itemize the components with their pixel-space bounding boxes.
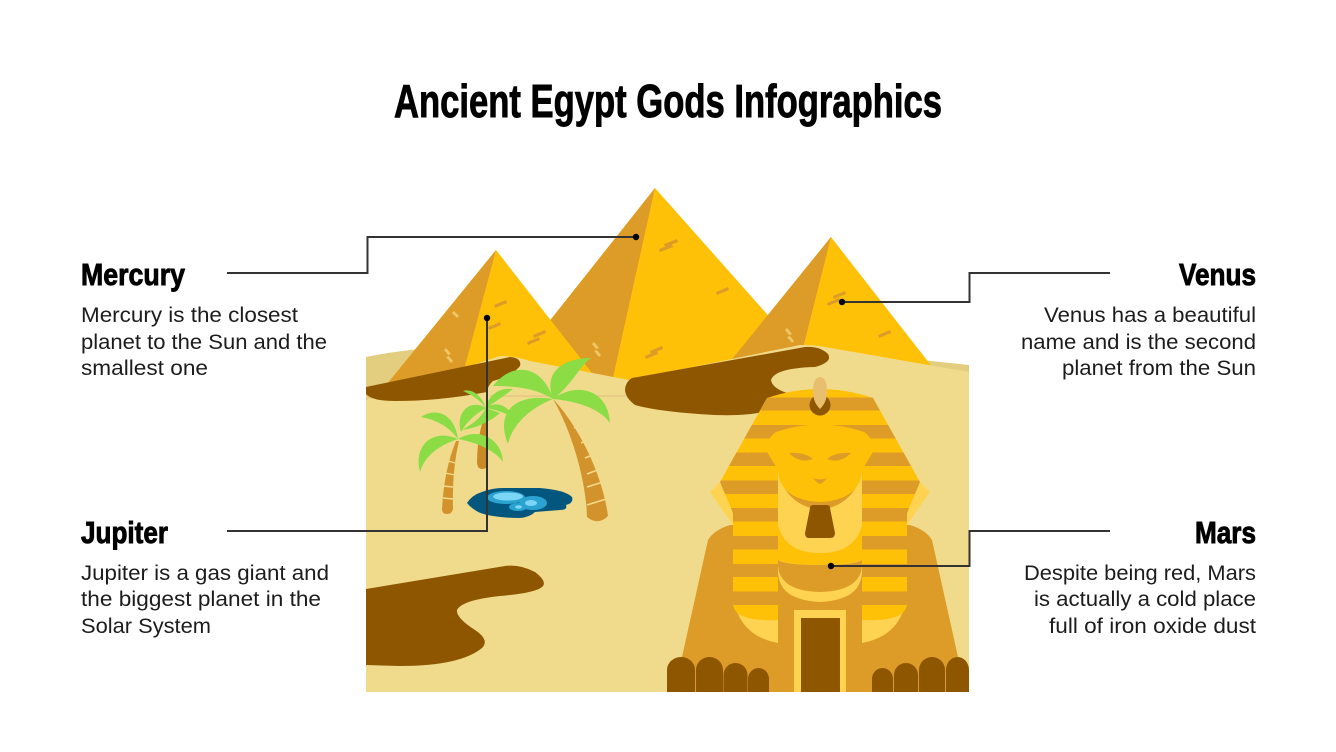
main pyramid <box>487 188 790 400</box>
far horizon line <box>490 395 626 397</box>
text block: Mars: full of iron oxide dust <box>1049 615 1256 638</box>
text block: Mercury: Mercury is the closest <box>81 304 298 327</box>
text block: Mars: Mars <box>1195 515 1256 550</box>
text block: Jupiter: the biggest planet in the <box>81 588 321 611</box>
text block: Mars: is actually a cold place <box>1034 588 1256 611</box>
callout: Mercury connector <box>227 234 639 273</box>
door <box>794 610 846 692</box>
headdress tips <box>710 482 930 525</box>
medium palm <box>419 413 503 514</box>
text block: Mars <box>1024 515 1256 638</box>
text block: Jupiter: Jupiter is a gas giant and <box>81 562 329 585</box>
uraeus <box>810 377 830 416</box>
text block: Mercury: Mercury <box>81 257 186 292</box>
back palm <box>460 389 513 469</box>
sand ground <box>366 345 969 692</box>
sphinx body <box>667 525 969 692</box>
text block: Mars: Despite being red, Mars <box>1024 562 1256 585</box>
left pyramid <box>374 250 613 400</box>
text block: Mercury: smallest one <box>81 357 208 380</box>
neck shadow <box>778 470 862 510</box>
text block: Jupiter <box>81 515 329 638</box>
beard <box>805 505 835 538</box>
text block: Mercury: planet to the Sun and the <box>81 331 327 354</box>
oasis water <box>467 488 572 518</box>
back dunes <box>366 349 969 400</box>
text block: Venus: Venus <box>1179 257 1256 292</box>
callout: Venus connector <box>839 273 1110 305</box>
headdress with stripes <box>720 389 920 620</box>
text block: Venus: Venus has a beautiful <box>1044 304 1256 327</box>
right pyramid <box>699 237 958 400</box>
illustration: desert scene <box>366 188 969 692</box>
text block: Venus <box>1021 257 1256 380</box>
eyes and mouth <box>789 453 851 484</box>
text block: Venus: name and is the second <box>1021 331 1256 354</box>
brown dune centre <box>625 347 829 415</box>
sphinx <box>667 377 969 692</box>
text block: Mercury <box>81 257 327 380</box>
face <box>767 424 873 502</box>
large palm <box>493 358 610 521</box>
brown dune front <box>366 566 544 666</box>
neck and collar <box>778 470 862 602</box>
text block: Venus: planet from the Sun <box>1062 357 1256 380</box>
callout: Jupiter connector <box>227 315 490 531</box>
lower lappets <box>733 590 907 643</box>
paws <box>667 657 969 692</box>
callout: Mars connector <box>828 531 1110 569</box>
infographic canvas <box>81 83 1256 692</box>
text block: Jupiter: Solar System <box>81 615 211 638</box>
text block: Jupiter: Jupiter <box>81 515 168 550</box>
title: Ancient Egypt Gods Infographics <box>394 75 942 127</box>
brown dune left <box>366 357 520 401</box>
